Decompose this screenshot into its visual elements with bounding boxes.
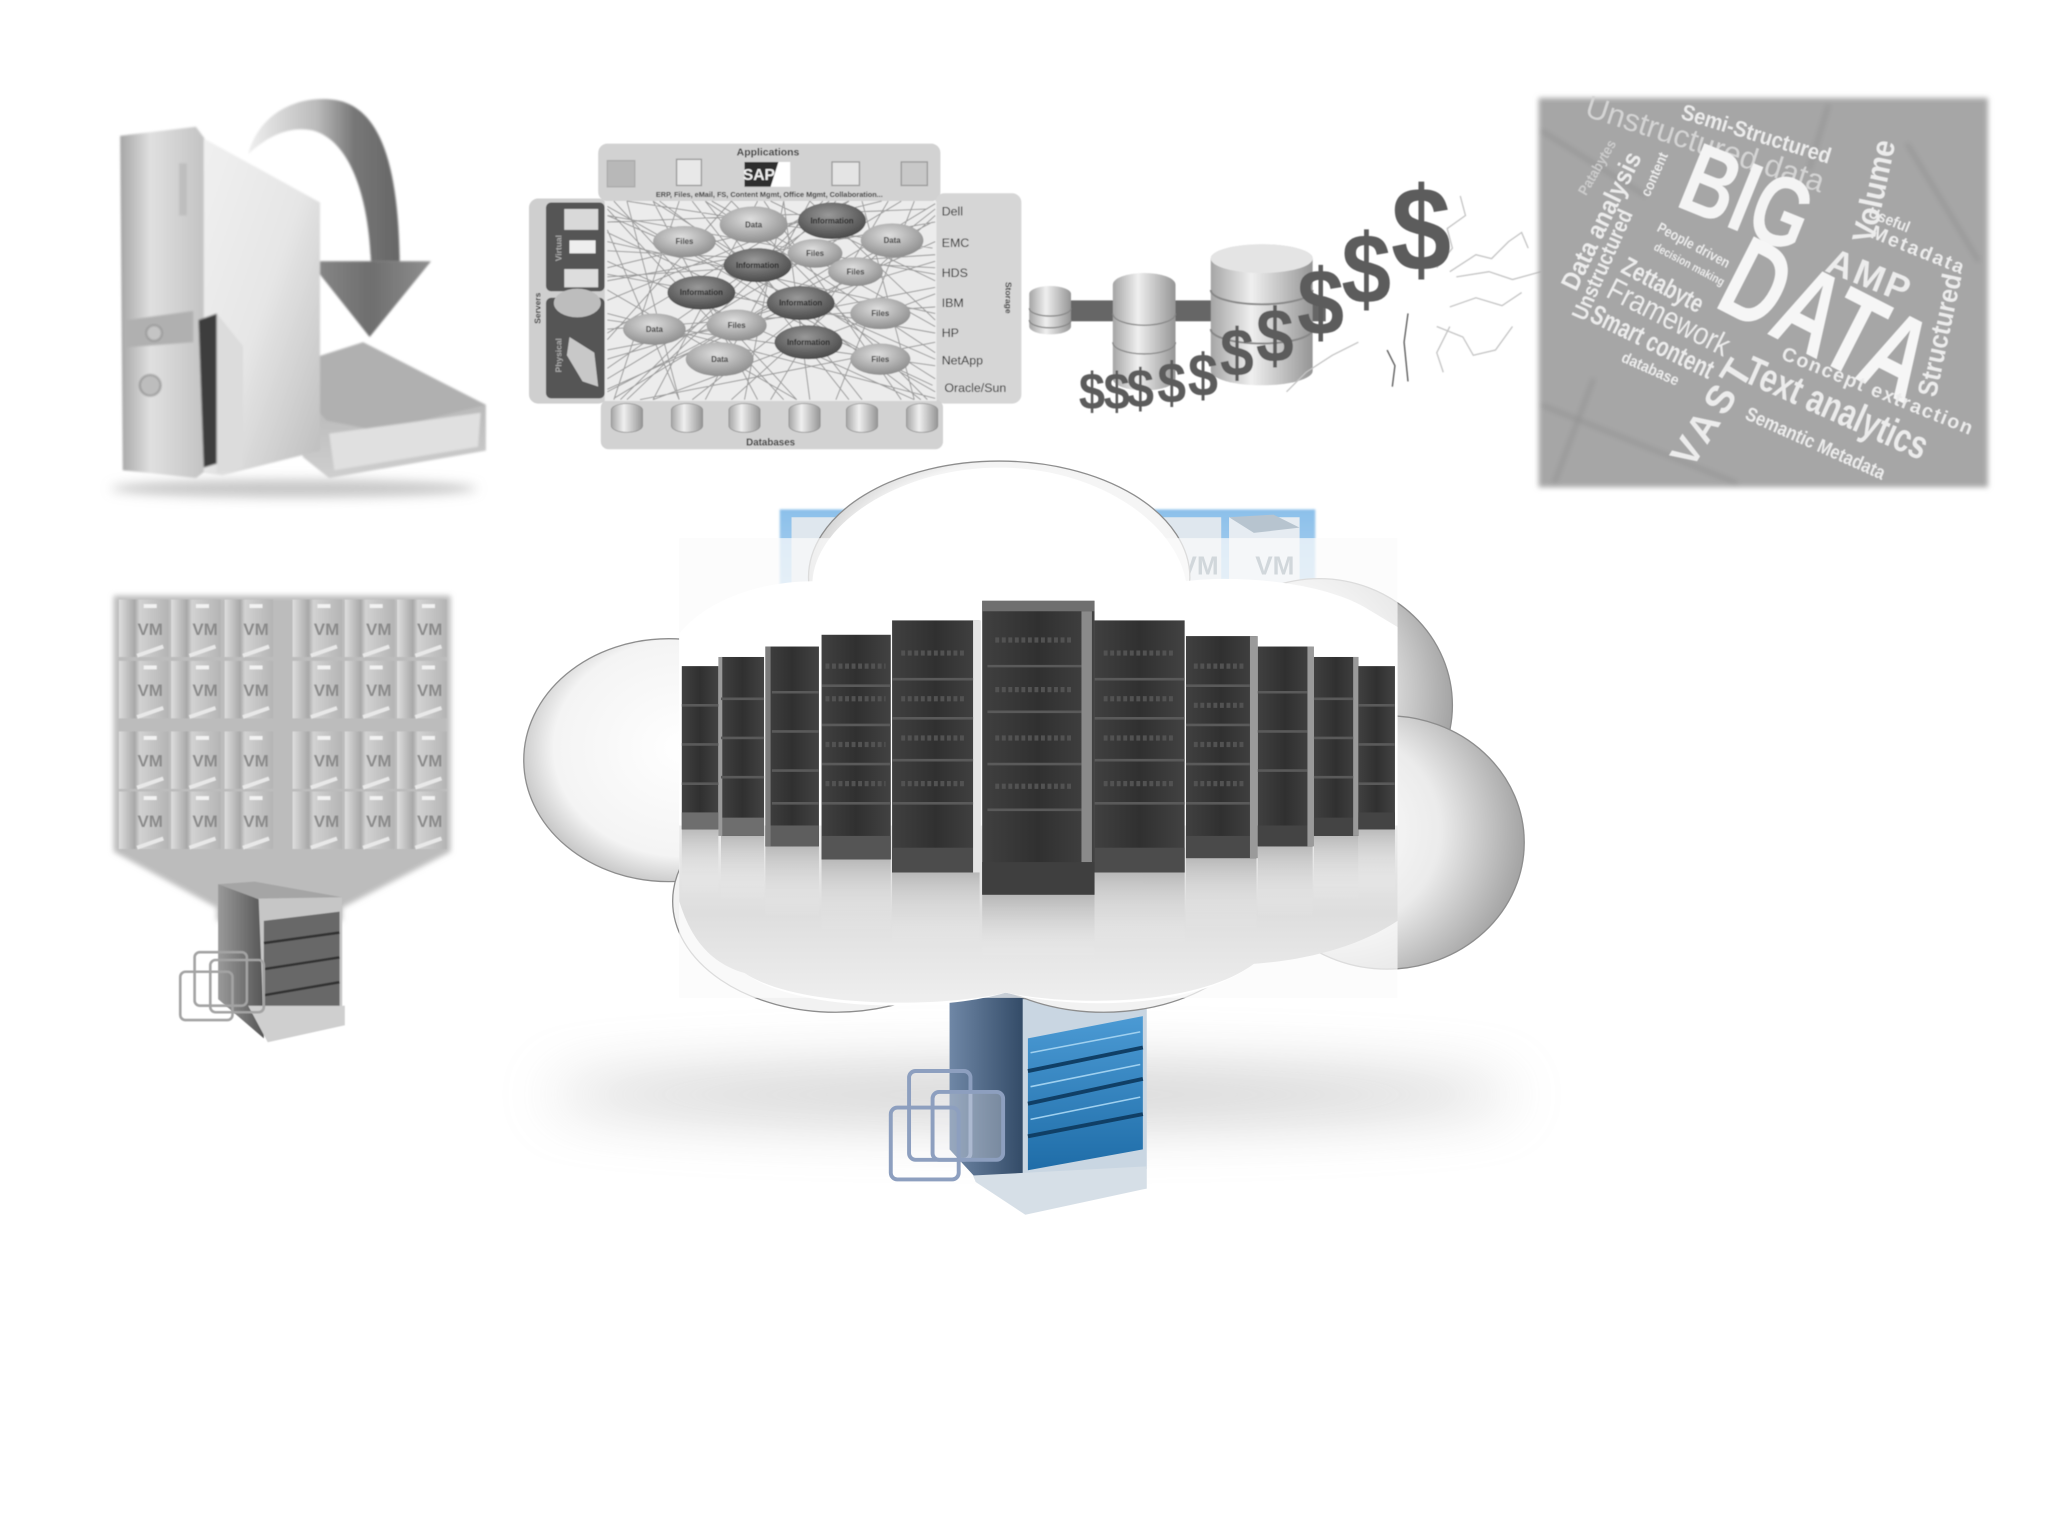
storage band: Storage — [1004, 282, 1014, 314]
VM box grid: VM — [243, 681, 269, 700]
word cloud terms: People driven — [1655, 219, 1733, 271]
word cloud terms: Useful — [1866, 205, 1912, 237]
servers band: Physical — [554, 338, 564, 372]
drop shadow under PC — [111, 479, 477, 498]
data nodes: Data — [745, 220, 763, 229]
VM box grid: VM — [417, 812, 442, 831]
VM box grid: VM — [192, 681, 218, 700]
word cloud terms: Semantic Metadata — [1742, 403, 1890, 484]
word cloud terms: database — [1619, 350, 1681, 390]
rising dollar signs: $ — [1157, 351, 1186, 415]
cracks — [1287, 196, 1541, 392]
data nodes: Information — [779, 299, 822, 308]
word cloud terms: Structured — [1911, 271, 1968, 399]
word cloud terms: Concept extraction — [1778, 343, 1977, 440]
word cloud terms: Patabytes — [1575, 137, 1619, 198]
applications band: SAP — [743, 167, 775, 184]
VM wall backdrop with projection — [114, 596, 451, 921]
servers band: Servers — [533, 292, 543, 324]
polished floor — [679, 825, 1398, 1003]
VM box grid: VM — [366, 681, 392, 700]
PC tower — [120, 127, 320, 478]
word cloud terms: Metadata — [1868, 221, 1969, 279]
server under cloud — [891, 993, 1147, 1215]
VM box grid — [119, 600, 447, 849]
VM box grid: VM — [366, 620, 392, 639]
applications band — [598, 144, 940, 201]
word cloud terms: Text analytics — [1738, 348, 1935, 469]
panel: data silos and rising cost — [1029, 163, 1541, 420]
servers band: Virtual — [554, 235, 564, 261]
pipe — [1064, 300, 1326, 321]
ground shadow under cloud — [549, 1068, 1515, 1121]
data nodes: Files — [806, 249, 825, 258]
VM box left — [792, 517, 841, 614]
word cloud terms: content — [1638, 149, 1671, 199]
word cloud terms: Framework — [1601, 272, 1736, 364]
small server — [218, 882, 345, 1042]
data nodes: Data — [884, 236, 901, 245]
data nodes — [623, 202, 923, 376]
VM box grid: VM — [417, 620, 442, 639]
servers band — [529, 199, 607, 404]
storage band: NetApp — [942, 353, 983, 367]
data nodes: Files — [871, 355, 890, 364]
VM box grid: VM — [243, 752, 269, 771]
blue drive bays — [1028, 1016, 1143, 1170]
word cloud terms: AMP — [1821, 240, 1919, 311]
VM box grid: VM — [192, 620, 218, 639]
word cloud terms: Unstructured data — [1581, 89, 1829, 199]
storage band — [935, 193, 1021, 404]
VM box grid: VM — [192, 812, 218, 831]
word cloud terms: Data analysis — [1556, 147, 1648, 295]
VM box middle: VM — [1179, 551, 1219, 581]
cloud — [524, 461, 1524, 1012]
rising dollar signs: $ — [1104, 362, 1130, 420]
data centre photo inset — [679, 468, 1398, 1006]
VM box grid: VM — [366, 812, 392, 831]
word cloud terms: Volume — [1845, 136, 1903, 246]
rising dollar signs: $ — [1297, 249, 1344, 354]
word cloud backdrop — [1539, 98, 1988, 487]
VM box right: VM — [1255, 551, 1294, 581]
word cloud terms: BIG — [1666, 121, 1829, 274]
small database — [1029, 286, 1071, 334]
data nodes: Information — [680, 288, 723, 297]
databases band: Databases — [746, 437, 796, 448]
left lobe — [524, 639, 814, 882]
data nodes: Information — [736, 261, 779, 270]
VM box grid: VM — [314, 681, 339, 700]
data nodes: Information — [810, 216, 854, 225]
VM box grid: VM — [137, 681, 163, 700]
medium database — [1113, 273, 1176, 391]
rising dollar signs: $ — [1220, 315, 1254, 391]
word cloud terms: decision making — [1651, 241, 1727, 289]
server base — [973, 1166, 1147, 1215]
VM box grid: VM — [137, 752, 163, 771]
applications band: ERP, Files, eMail, FS, Content Mgmt, Office Mgmt, Collaboration... — [656, 190, 883, 199]
rising dollar signs: $ — [1188, 342, 1218, 409]
storage band: EMC — [942, 236, 969, 250]
storage band: Dell — [942, 205, 963, 219]
data nodes: Data — [646, 325, 663, 334]
word cloud terms: VAST — [1663, 348, 1764, 475]
VMware logo — [891, 1071, 1003, 1179]
data nodes: Data — [711, 355, 729, 364]
storage band: IBM — [942, 296, 964, 310]
bottom left lobe — [673, 790, 999, 1012]
heading: applications: Applications — [737, 147, 800, 158]
storage band: Oracle/Sun — [944, 381, 1006, 395]
photo cloud shape — [679, 468, 1398, 1006]
VM box grid: VM — [314, 620, 339, 639]
rising dollar signs: $ — [1391, 163, 1451, 297]
panel: PC backup to drive — [111, 99, 486, 498]
rack reflections — [682, 829, 1395, 960]
VM box grid: VM — [314, 812, 339, 831]
rising dollar signs — [1079, 163, 1451, 420]
word cloud terms: Semi-Structured — [1678, 100, 1834, 169]
VM box grid: VM — [366, 752, 392, 771]
rising dollar signs: $ — [1256, 295, 1294, 379]
VM box grid: VM — [417, 752, 442, 771]
word cloud terms: Smart content — [1585, 299, 1719, 385]
small VMware logo — [180, 952, 264, 1020]
tangled connection lines — [605, 201, 936, 401]
storage band: HP — [942, 326, 959, 340]
VM box grid: VM — [314, 752, 339, 771]
word cloud terms: DATA — [1701, 211, 1954, 427]
blue VM panel behind cloud — [780, 509, 1315, 627]
VM box grid: VM — [137, 620, 163, 639]
VM box grid: VM — [243, 620, 269, 639]
VM box grid: VM — [137, 812, 163, 831]
VM box grid: VM — [192, 752, 218, 771]
server front — [1023, 999, 1147, 1182]
data nodes: Files — [675, 237, 694, 246]
word cloud terms — [1556, 89, 1977, 484]
data nodes: Files — [728, 321, 746, 330]
panel: big data word cloud — [1539, 89, 1988, 487]
top lobe — [808, 461, 1190, 694]
external drive — [281, 342, 486, 478]
server racks row — [682, 601, 1395, 895]
word cloud terms: Zettabyte — [1617, 251, 1709, 318]
right lower lobe — [1250, 716, 1524, 969]
rising dollar signs: $ — [1127, 359, 1154, 420]
VM box right — [1229, 515, 1300, 614]
server side — [950, 993, 1028, 1182]
rising dollar signs: $ — [1341, 215, 1391, 325]
data nodes: Files — [871, 309, 890, 318]
storage band: HDS — [942, 266, 968, 280]
large database — [1211, 244, 1313, 385]
rack unit detail lines — [682, 666, 1395, 810]
word cloud terms: Unstructured — [1567, 206, 1638, 324]
right upper lobe — [1186, 579, 1452, 832]
VM box middle — [1155, 517, 1221, 614]
VM box grid: VM — [243, 812, 269, 831]
panel: VM consolidation — [114, 596, 451, 1042]
data nodes: Files — [847, 267, 865, 276]
rising dollar signs: $ — [1079, 362, 1105, 420]
databases band — [601, 400, 943, 449]
bottom right lobe — [940, 790, 1267, 1012]
curved arrow — [248, 99, 431, 337]
panel: tangled storage diagram — [529, 144, 1021, 449]
VM box grid: VM — [417, 681, 442, 700]
photo background — [679, 538, 1398, 998]
data nodes: Information — [787, 338, 830, 347]
